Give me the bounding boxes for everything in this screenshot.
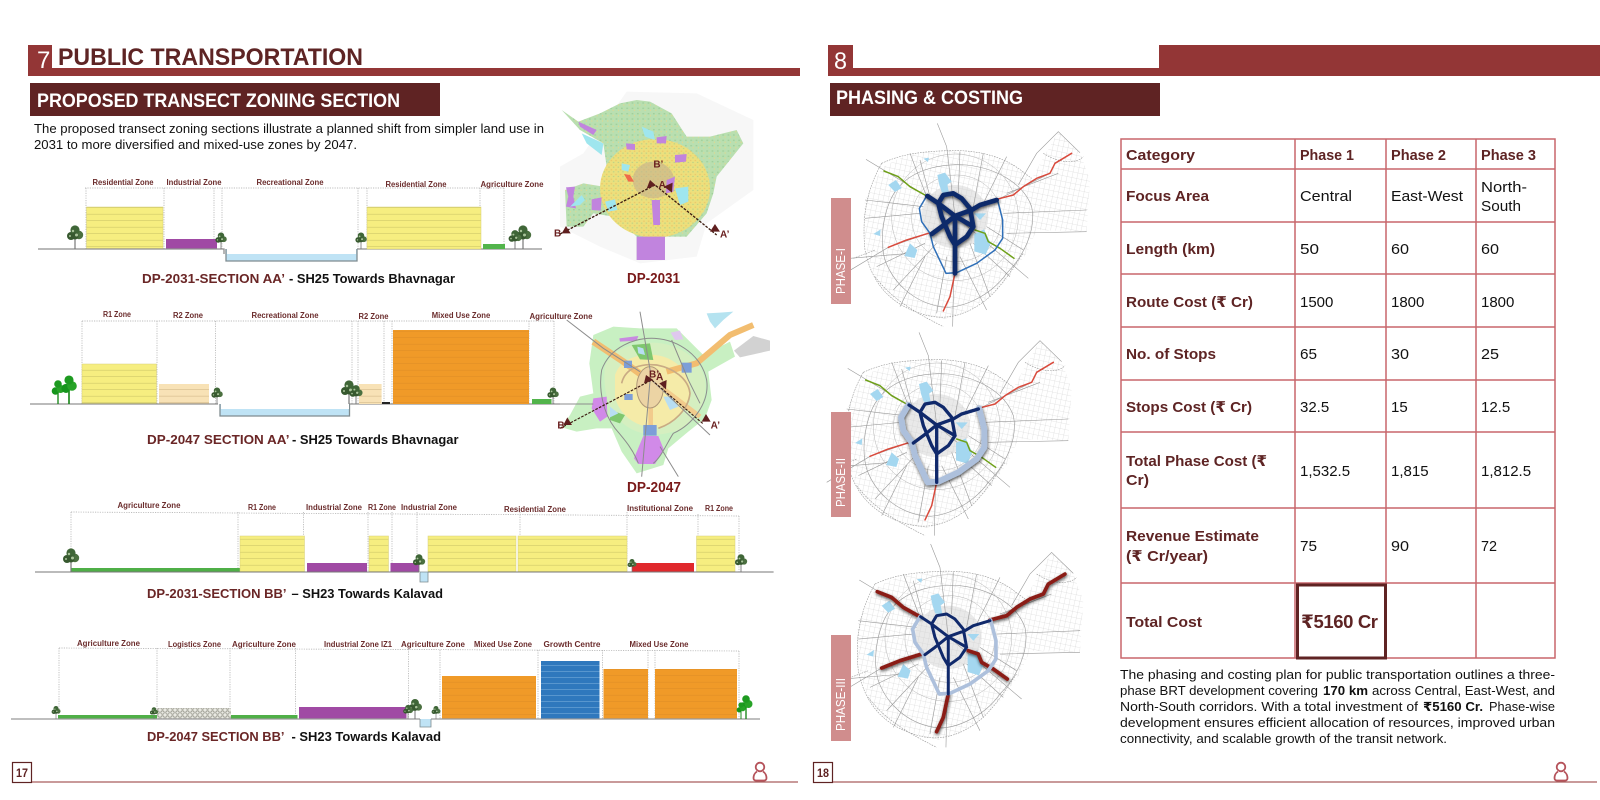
row: revenue estimate: 90 — [1391, 538, 1409, 555]
row: number of stops — [1126, 346, 1499, 363]
row: total phase cost — [1126, 453, 1531, 489]
intro text: The proposed transect zoning sections illustrate a planned shift from simpler land use in — [34, 121, 544, 136]
row: stops cost: 12.5 — [1481, 399, 1510, 416]
zone labels — [92, 178, 544, 189]
section marks — [557, 369, 720, 431]
row: route cost: 1500 — [1300, 294, 1333, 311]
intro text: 2031 to more diversified and mixed-use zones by 2047. — [34, 137, 357, 152]
row: number of stops: 25 — [1481, 346, 1499, 363]
paragraph: phasing summary: North-South corridors. With a total investment of — [1120, 700, 1419, 714]
zone labels: Mixed Use Zone — [630, 640, 689, 649]
zone labels: R1 Zone — [705, 504, 733, 513]
zone labels: Agriculture Zone — [77, 639, 141, 648]
caption: DP-2047 section BB' — [147, 729, 441, 744]
paragraph: phasing summary: connectivity, and scalable growth of the transit network. — [1120, 732, 1447, 746]
map: phase II network — [827, 332, 1072, 536]
zone labels: Mixed Use Zone — [474, 640, 533, 649]
row: revenue estimate: Revenue Estimate — [1126, 528, 1259, 545]
paragraph: phasing summary: 170 km — [1323, 684, 1368, 698]
zone labels: Agriculture Zone — [118, 501, 181, 510]
zone labels: Residential Zone — [504, 505, 567, 514]
map: DP-2047 land use — [557, 312, 770, 477]
zone labels: Growth Centre — [544, 640, 601, 649]
row: total phase cost: 1,815 — [1391, 463, 1429, 480]
zone labels: Industrial Zone IZ1 — [324, 640, 393, 649]
row: number of stops: 65 — [1300, 346, 1317, 363]
label: phase I — [831, 198, 851, 304]
row: header — [1126, 147, 1536, 164]
zone labels: Recreational Zone — [256, 178, 324, 187]
caption: DP-2031 section AA': DP-2031-SECTION AA’ — [142, 271, 285, 286]
footer: page 18 — [814, 762, 1597, 782]
paragraph: phasing summary: development ensures efficient allocation of resources, improved urban — [1120, 716, 1555, 730]
footer: page 18: 18 — [817, 766, 829, 780]
zone labels: Mixed Use Zone — [432, 311, 491, 320]
zone labels — [118, 501, 733, 514]
zone labels: R2 Zone — [358, 312, 389, 321]
paragraph: phasing summary: The phasing and costing plan for public transportation outlines a three- — [1120, 668, 1555, 682]
label: phase II: PHASE-II — [833, 458, 848, 507]
section marks: B — [557, 420, 565, 431]
caption: DP-2047 section AA' — [147, 432, 458, 447]
section marks: A — [659, 180, 666, 191]
footer: page 17: 17 — [16, 766, 28, 780]
map: phase III network — [838, 544, 1083, 747]
row: total cost — [1126, 585, 1386, 658]
row: route cost: 1800 — [1391, 294, 1424, 311]
row: number of stops: 30 — [1391, 346, 1409, 363]
row: header: Phase 2 — [1391, 147, 1446, 164]
logo: page 17 — [754, 763, 766, 780]
paragraph: phasing summary: Phase-wise — [1489, 700, 1555, 714]
row: total phase cost: 1,812.5 — [1481, 463, 1531, 480]
row: header: Category — [1126, 147, 1196, 164]
row: header: Phase 3 — [1481, 147, 1536, 164]
heading: phasing and costing: PHASING & COSTING — [836, 88, 1023, 109]
left page header — [28, 45, 800, 76]
footer: page 17 — [12, 762, 798, 782]
section marks: A — [656, 372, 663, 383]
row: number of stops: No. of Stops — [1126, 346, 1216, 363]
row: revenue estimate: 75 — [1300, 538, 1317, 555]
map: phase I network — [845, 123, 1090, 327]
row: stops cost: 15 — [1391, 399, 1408, 416]
caption: DP-2031 section BB': – SH23 Towards Kalavad — [292, 586, 443, 601]
zone labels: Recreational Zone — [252, 311, 319, 320]
row: focus area — [1126, 179, 1527, 215]
paragraph: phasing summary: across Central, East-West, and — [1372, 684, 1555, 698]
zone labels: R1 Zone — [103, 310, 131, 319]
row: focus area: Focus Area — [1126, 188, 1210, 205]
row: total phase cost: Cr) — [1126, 472, 1149, 489]
zone labels: Residential Zone — [92, 178, 154, 187]
label: phase I: PHASE-I — [833, 248, 848, 294]
row: revenue estimate — [1126, 528, 1497, 565]
row: header: Phase 1 — [1300, 147, 1354, 164]
right page header — [828, 45, 1600, 76]
section number 8: 8 — [834, 48, 847, 75]
zone labels: Industrial Zone — [306, 503, 363, 512]
row: length: 60 — [1481, 241, 1499, 258]
logo: page 18 — [1554, 763, 1568, 780]
row: focus area: East-West — [1391, 188, 1464, 205]
section chart: DP-2047 BB' — [11, 639, 760, 727]
caption: DP-2031 section BB' — [147, 586, 443, 601]
paragraph: phasing summary: phase BRT development covering — [1120, 684, 1318, 698]
heading: proposed transect zoning section: PROPOSED TRANSECT ZONING SECTION — [37, 90, 400, 112]
zone labels: Industrial Zone — [401, 503, 458, 512]
row: stops cost: 32.5 — [1300, 399, 1329, 416]
section marks: A’ — [720, 229, 730, 240]
section marks: A’ — [711, 420, 720, 431]
row: focus area: North- — [1481, 179, 1527, 196]
caption: DP-2031: DP-2031 — [627, 271, 680, 287]
row: length — [1126, 241, 1499, 258]
heading: proposed transect zoning section — [30, 83, 440, 116]
zone labels: R1 Zone — [368, 503, 396, 512]
zone labels: Agriculture Zone — [480, 180, 544, 189]
row: route cost: 1800 — [1481, 294, 1514, 311]
row: length: 50 — [1300, 241, 1319, 258]
zone labels — [77, 639, 689, 649]
row: total cost: ₹5160 Cr — [1301, 611, 1378, 632]
section number 7: 7 — [37, 47, 50, 74]
row: focus area: Central — [1300, 188, 1352, 205]
section marks — [554, 159, 730, 240]
zone labels — [103, 310, 593, 321]
caption: DP-2047 section BB': - SH23 Towards Kalavad — [292, 729, 441, 744]
section marks: B’ — [649, 369, 659, 380]
section chart: DP-2031 BB' — [35, 501, 774, 582]
row: stops cost — [1126, 399, 1510, 416]
row: route cost — [1126, 294, 1514, 311]
row: total cost: Total Cost — [1126, 614, 1202, 631]
caption: DP-2047 section BB': DP-2047 SECTION BB’ — [147, 729, 284, 744]
caption: DP-2031 section BB': DP-2031-SECTION BB’ — [147, 586, 286, 601]
label: phase II — [831, 412, 851, 517]
section chart: DP-2047 AA' — [30, 310, 593, 416]
paragraph: phasing summary: ₹5160 Cr. — [1423, 700, 1483, 714]
paragraph: phasing summary — [1120, 668, 1555, 746]
section marks: B — [554, 229, 561, 240]
section chart: DP-2031 AA' — [38, 178, 544, 261]
zone labels: R2 Zone — [173, 311, 204, 320]
row: length: Length (km) — [1126, 241, 1215, 258]
zone labels: R1 Zone — [248, 503, 276, 512]
row: stops cost: Stops Cost (₹ Cr) — [1126, 399, 1252, 416]
zone labels: Residential Zone — [386, 180, 447, 189]
row: revenue estimate: 72 — [1481, 538, 1497, 555]
zone labels: Industrial Zone — [166, 178, 222, 187]
row: revenue estimate: (₹ Cr/year) — [1126, 548, 1208, 565]
caption: DP-2047 section AA': DP-2047 SECTION AA’ — [147, 432, 290, 447]
map: DP-2031 land use — [554, 92, 753, 263]
row: focus area: South — [1481, 198, 1521, 215]
caption: DP-2047 section AA': - SH25 Towards Bhavnagar — [292, 432, 458, 447]
heading: phasing and costing — [830, 83, 1160, 116]
row: total phase cost: Total Phase Cost (₹ — [1126, 453, 1267, 470]
label: phase III: PHASE-III — [833, 678, 848, 731]
table: phasing and costing — [1121, 139, 1555, 658]
zone labels: Agriculture Zone — [232, 640, 297, 649]
caption: DP-2031 section AA' — [142, 271, 455, 286]
zone labels: Logistics Zone — [168, 640, 222, 649]
row: route cost: Route Cost (₹ Cr) — [1126, 294, 1253, 311]
zone labels: Agriculture Zone — [530, 312, 593, 321]
label: phase III — [831, 635, 851, 741]
title: public transportation: PUBLIC TRANSPORTATION — [58, 44, 363, 71]
caption: DP-2031 section AA': - SH25 Towards Bhavnagar — [289, 271, 455, 286]
row: length: 60 — [1391, 241, 1409, 258]
section marks: B’ — [653, 159, 664, 170]
intro text — [34, 121, 544, 152]
caption: DP-2047: DP-2047 — [627, 480, 681, 496]
row: total phase cost: 1,532.5 — [1300, 463, 1350, 480]
zone labels: Institutional Zone — [627, 504, 694, 513]
zone labels: Agriculture Zone — [401, 640, 466, 649]
